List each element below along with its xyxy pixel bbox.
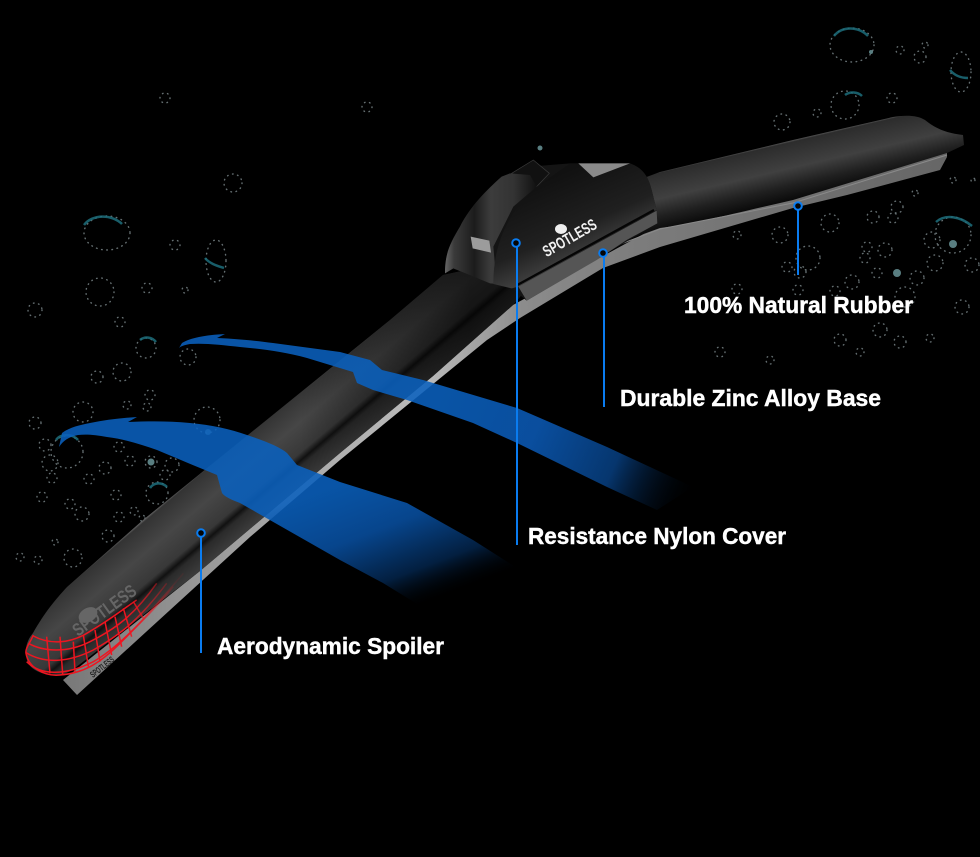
logo dome <box>76 604 100 626</box>
dome highlight <box>471 237 491 253</box>
connector logo dome <box>555 224 567 234</box>
droplet glints <box>148 50 957 466</box>
blade: lower spoiler <box>26 250 560 675</box>
callout: resistance nylon cover <box>512 239 786 549</box>
rubber logo: SPOTLESS <box>88 654 116 680</box>
callout: aerodynamic spoiler: Aerodynamic Spoiler <box>217 633 444 659</box>
dome <box>445 173 537 284</box>
blade: rubber strip <box>63 150 947 695</box>
blade shading near connector <box>300 250 560 487</box>
blue airflow swoosh: upper <box>179 334 693 510</box>
back tab <box>512 160 549 187</box>
blade: upper spoiler <box>560 116 964 270</box>
blue airflow swoosh: lower <box>59 417 525 612</box>
callout: natural rubber <box>684 202 913 318</box>
red aerodynamic mesh <box>26 573 183 675</box>
water droplets <box>16 28 979 567</box>
connector base <box>445 163 657 301</box>
callout: aerodynamic spoiler <box>197 529 444 659</box>
teal droplet highlights <box>56 28 972 488</box>
top notch <box>578 163 630 177</box>
connector logo: SPOTLESS <box>540 216 600 261</box>
callout: durable zinc alloy base <box>599 249 881 411</box>
blade logo: SPOTLESS <box>69 581 140 640</box>
base shadow line <box>517 210 654 285</box>
connector adapter <box>445 160 657 301</box>
rubber highlight line <box>600 155 947 252</box>
callout: resistance nylon cover: Resistance Nylon Cover <box>528 523 786 549</box>
callout: durable zinc alloy base: Durable Zinc Alloy Base <box>620 385 881 411</box>
callout: natural rubber: 100% Natural Rubber <box>684 292 913 318</box>
zinc base <box>518 211 657 301</box>
side face <box>493 163 657 288</box>
